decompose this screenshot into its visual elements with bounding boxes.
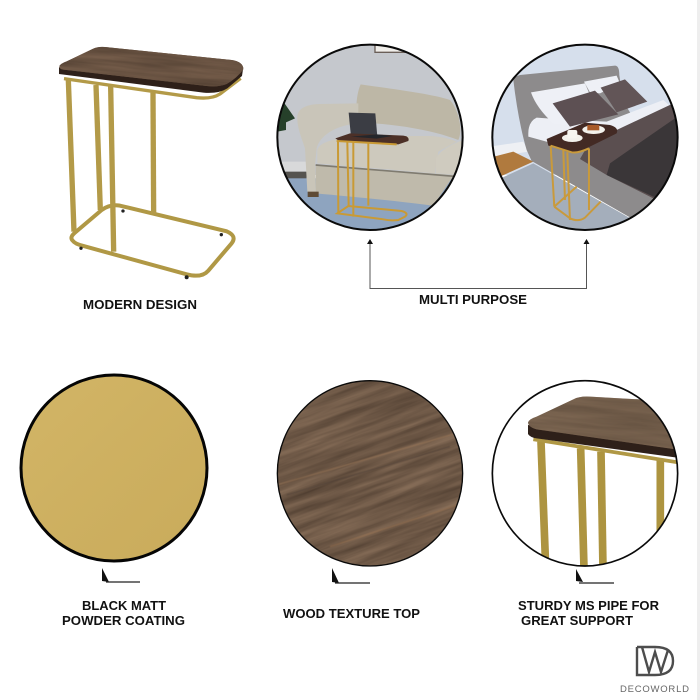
seat seam <box>316 165 454 176</box>
mattress <box>528 100 669 142</box>
wall <box>493 46 670 175</box>
blanket <box>580 104 675 198</box>
side table top <box>335 133 409 144</box>
wood grain noise <box>278 382 462 564</box>
sofa back cushion <box>356 84 460 140</box>
page edge strip <box>697 0 700 700</box>
baseboard <box>282 162 306 172</box>
wood circle outline <box>277 381 463 566</box>
white background <box>490 378 680 568</box>
top edge <box>528 425 680 458</box>
under-top frame <box>533 439 680 463</box>
logo wordmark: DECOWORLD <box>620 684 689 695</box>
dark pillows <box>553 91 618 127</box>
laptop <box>349 113 377 137</box>
label: modern design: MODERN DESIGN <box>83 297 197 312</box>
pipe circle outline <box>492 381 678 566</box>
wood grain lines <box>277 433 463 547</box>
sofa arm <box>297 103 358 193</box>
circle: pipe detail <box>490 378 686 568</box>
side table frame <box>551 146 601 220</box>
circle: wood texture swatch <box>276 380 464 567</box>
wood base <box>278 442 458 486</box>
seat cushions <box>317 136 457 173</box>
baseboard <box>494 142 528 156</box>
label: black matt powder coating: BLACK MATT <box>82 598 166 613</box>
product photo: side table <box>59 46 244 280</box>
white pillows <box>531 83 589 120</box>
table feet <box>79 209 223 279</box>
label: black matt powder coating: POWDER COATING <box>62 613 185 628</box>
picture frame <box>374 46 406 53</box>
arrow: multi purpose connector <box>367 239 590 288</box>
pointer: pipe detail <box>576 569 614 583</box>
cup and saucer <box>562 134 583 142</box>
table base frame <box>71 205 234 276</box>
rug <box>502 164 629 229</box>
circle: gold powder coating swatch <box>21 375 207 561</box>
rug floor <box>288 178 452 229</box>
plate of food <box>582 125 605 134</box>
pointer: wood swatch <box>332 568 370 583</box>
sofa front <box>316 165 454 206</box>
bed headboard and base <box>513 66 654 218</box>
circle: bed scene <box>490 42 683 235</box>
logo mark <box>637 647 673 675</box>
bed circle outline <box>492 45 678 230</box>
label: wood texture top: WOOD TEXTURE TOP <box>283 606 420 621</box>
under-top frame <box>64 78 241 98</box>
table top edge <box>59 67 243 93</box>
pipe legs <box>541 442 660 568</box>
label: sturdy ms pipe <box>518 598 660 628</box>
top surface <box>521 384 686 461</box>
wall <box>278 46 462 175</box>
side table top <box>547 123 617 153</box>
sofa circle outline <box>277 45 463 230</box>
pointer: gold swatch <box>102 568 140 582</box>
side table frame <box>337 141 407 220</box>
label: sturdy ms pipe: GREAT SUPPORT <box>521 613 633 628</box>
plant <box>278 104 295 132</box>
label: multi purpose: MULTI PURPOSE <box>419 292 527 307</box>
sofa foot <box>308 192 319 197</box>
wood floor <box>495 152 533 176</box>
table legs <box>68 80 154 252</box>
label: sturdy ms pipe: STURDY MS PIPE FOR <box>518 598 660 613</box>
circle: sofa scene <box>270 42 470 235</box>
table top surface <box>59 46 244 86</box>
logo: decoworld <box>620 647 689 695</box>
laptop base <box>351 134 393 139</box>
label: black matt powder coating <box>62 598 185 628</box>
